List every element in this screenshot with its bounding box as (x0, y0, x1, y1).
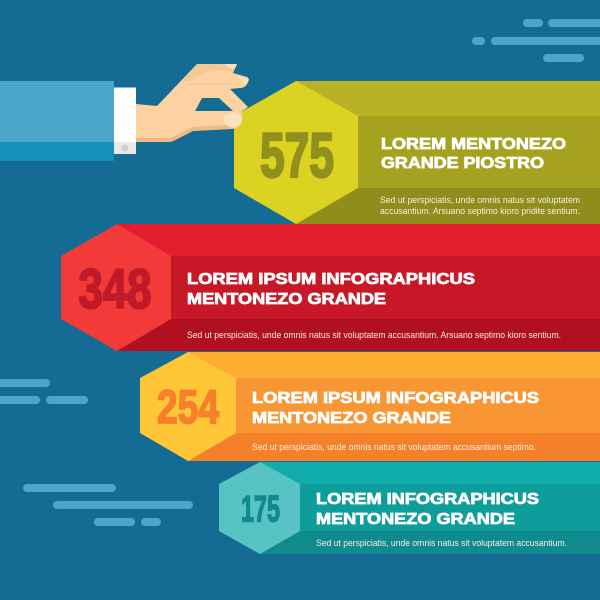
heading: 575: LOREM MENTONEZO (381, 136, 566, 153)
heading: 175 (316, 491, 539, 528)
panel: 254 band (140, 352, 600, 461)
text: 575: accusantium. Arsuano septimo kioro pridite sentium. (380, 205, 580, 216)
heading: 348 (187, 271, 475, 308)
heading: 254: LOREM IPSUM INFOGRAPHICUS (252, 390, 539, 407)
hexagon: 348 (61, 224, 171, 351)
number: 175: 175 (241, 487, 280, 529)
text: 254: Sed ut perspiciatis, unde omnis natus sit voluptatem accusantium septimo. (252, 441, 536, 452)
heading: 175: MENTONEZO GRANDE (316, 511, 515, 528)
heading: 254 (252, 390, 539, 427)
hexagon: 575 (234, 81, 358, 224)
number: 254: 254 (157, 380, 219, 433)
sleeve (0, 81, 114, 161)
gap between finger and thumb (195, 98, 233, 111)
panel: 175 band (219, 462, 600, 554)
heading: 348: MENTONEZO GRANDE (187, 291, 386, 308)
icon: hand in sleeve (0, 64, 249, 161)
panel: 348 band (61, 224, 600, 351)
hand (136, 64, 249, 142)
hexagon: 254 (140, 352, 236, 461)
text: 175: Sed ut perspiciatis, unde omnis natus sit voluptatem accusantium. (316, 537, 567, 548)
heading: 575: GRANDE PIOSTRO (381, 155, 544, 172)
text: 575 (380, 194, 580, 216)
heading: 175: LOREM INFOGRAPHICUS (316, 491, 539, 508)
number: 575: 575 (260, 121, 334, 191)
cuff (114, 88, 136, 154)
hexagon: 175 (219, 462, 300, 554)
heading: 348: LOREM IPSUM INFOGRAPHICUS (187, 271, 475, 288)
text: 348: Sed ut perspiciatis, unde omnis natus sit voluptatem accusantium. Arsuano septimo kioro sentium. (187, 329, 561, 340)
heading: 575 (381, 136, 566, 172)
text: 575: Sed ut perspiciatis, unde omnis natus sit voluptatem (380, 194, 580, 205)
panel: 575 band (234, 81, 600, 224)
heading: 254: MENTONEZO GRANDE (252, 410, 451, 427)
number: 348: 348 (78, 257, 152, 320)
